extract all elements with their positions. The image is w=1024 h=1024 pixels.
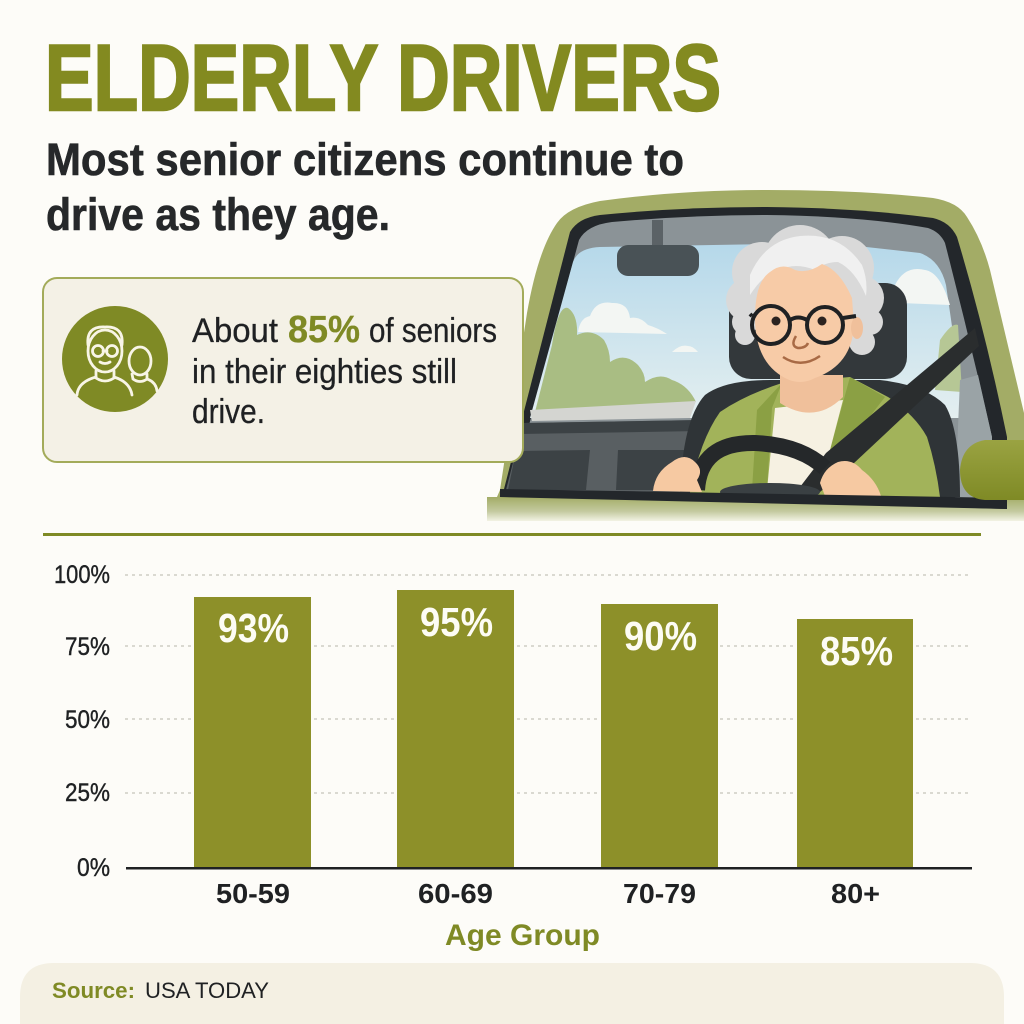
dashboard [506, 420, 700, 492]
title: ELDERLY DRIVERS [45, 25, 721, 130]
y-axis labels: 25% [65, 779, 110, 807]
source footer: Source: [52, 978, 135, 1003]
callout box [43, 278, 523, 462]
y-axis labels: 0% [77, 854, 110, 882]
source footer [20, 963, 1004, 1024]
y-axis labels: 50% [65, 706, 110, 734]
bar: 70-79: 90% [624, 613, 697, 659]
callout panel [43, 278, 523, 462]
y-axis labels: 75% [65, 633, 110, 661]
source footer: USA TODAY [145, 978, 269, 1003]
seat belt [800, 328, 979, 492]
jacket lapels [752, 377, 885, 490]
icon: seniors [62, 306, 168, 412]
x-axis labels: 60-69 [418, 878, 493, 909]
shirt [767, 400, 843, 490]
glasses [750, 306, 856, 344]
callout text: in their eighties still [192, 353, 457, 391]
windshield frame [503, 207, 1007, 509]
right hand [820, 461, 881, 496]
car lower strip [487, 497, 1024, 521]
bar: 50-59 [194, 597, 311, 868]
bar: 60-69 [397, 590, 514, 868]
bar: 80+ [797, 619, 913, 868]
wheel hub [720, 483, 820, 501]
bar chart [54, 561, 972, 952]
bar: 70-79 [601, 604, 718, 868]
road strip [530, 401, 696, 421]
eyes [772, 316, 826, 326]
subtitle: drive as they age. [46, 189, 390, 240]
rear-view mirror [617, 245, 699, 276]
ear [851, 317, 863, 339]
neck [780, 375, 843, 413]
steering wheel [697, 443, 825, 490]
seat [680, 380, 960, 497]
hair highlights [750, 236, 866, 296]
callout text: of seniors [369, 312, 497, 350]
trees [535, 308, 696, 412]
callout text: drive. [192, 393, 265, 431]
headrest [729, 283, 907, 379]
right pillar [955, 375, 992, 498]
x-axis labels: 50-59 [216, 878, 290, 909]
left hand [653, 457, 702, 492]
jacket [690, 377, 940, 497]
subtitle [46, 134, 684, 240]
dashboard lower panels [508, 450, 690, 490]
windshield bottom frame [500, 489, 1007, 509]
face [755, 264, 854, 382]
bar: 60-69: 95% [420, 599, 493, 645]
callout text: About [192, 312, 279, 350]
callout text: 85% [288, 309, 360, 351]
side mirror [960, 440, 1024, 500]
sky [530, 243, 962, 418]
bar: 50-59: 93% [218, 605, 289, 651]
x-axis labels: 70-79 [623, 878, 696, 909]
y-axis labels: 100% [54, 561, 110, 589]
y-axis labels [54, 561, 110, 882]
rear-view mirror stem [652, 220, 663, 246]
x-axis title: Age Group [445, 919, 600, 952]
subtitle: Most senior citizens continue to [46, 134, 684, 185]
hair [726, 225, 884, 355]
illustration: senior woman driving a car [487, 190, 1024, 521]
right tree [935, 325, 962, 392]
dashboard top band [520, 420, 700, 434]
interior glass [512, 215, 992, 498]
clouds [578, 269, 950, 352]
car body [487, 190, 1024, 520]
x-axis labels [216, 878, 880, 909]
x-axis labels: 80+ [831, 878, 880, 909]
bar: 80+: 85% [820, 628, 893, 674]
nose and smile [783, 336, 820, 363]
callout text [192, 309, 497, 431]
